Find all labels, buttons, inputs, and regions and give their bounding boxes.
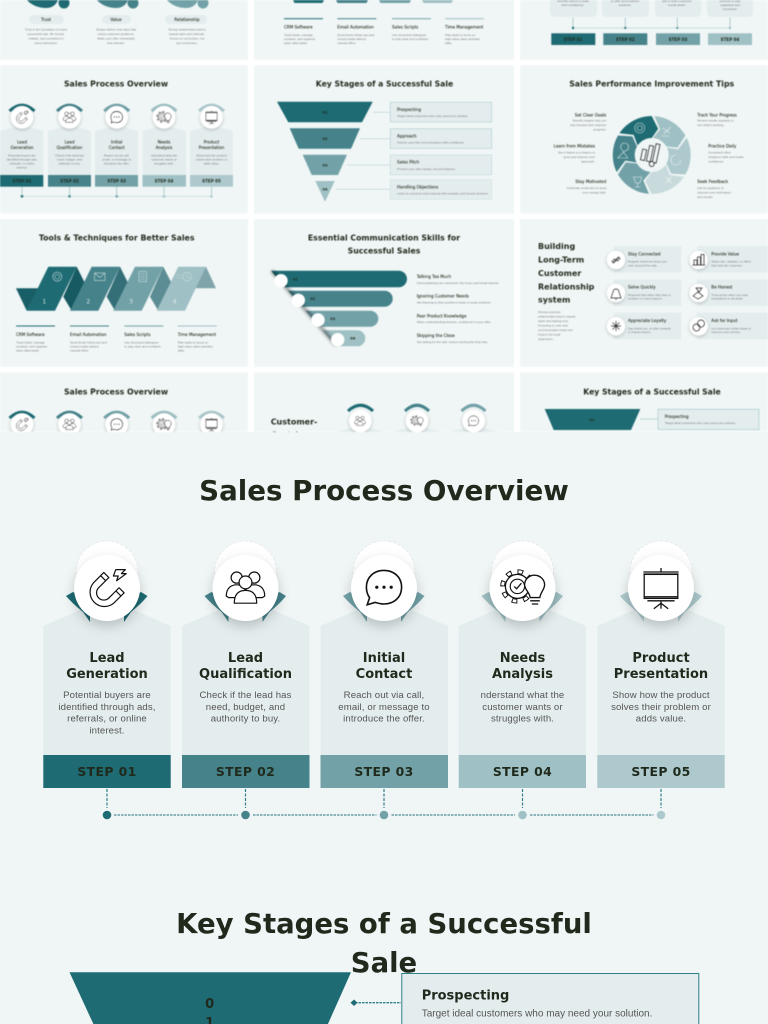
panel: tools and techniques thumbnail: Plan tasks to focus on [178,340,208,344]
panel: tools bars thumbnail [254,0,514,60]
panel: key stages funnel thumbnail: Sales Pitch [397,160,420,165]
panel: sales process overview thumbnail: struggles with. [154,162,174,166]
step 04: needs analysis: customer wants or [482,702,563,713]
panel: tools bars thumbnail: Plan tasks to focus on [445,33,476,37]
panel: sales process repeat thumbnail (clipped) [0,372,248,432]
callout: prospecting: Target ideal customers who may need your solution. [422,1009,652,1020]
panel: tools bars thumbnail: high-value sales activities [445,37,481,41]
panel: long-term relationship thumbnail: to repeat buyers. [628,330,651,334]
panel: tools and techniques thumbnail: 4 [173,298,177,306]
timeline connector [103,789,665,819]
panel: performance tips thumbnail: Review results regularly to [697,118,734,122]
panel: tools bars thumbnail: Email Automation [337,24,374,29]
panel: sales process overview thumbnail: authority to buy. [59,162,81,166]
step 03: initial contact: Contact [356,667,412,682]
panel: sales process overview thumbnail: Show how the product [196,154,227,158]
panel: performance tips thumbnail: stay focused and measure [570,123,607,127]
panel: core values thumbnail: Strong relationships lead to [168,28,206,32]
panel: long-term relationship thumbnail: Trust grows when you stay [711,293,748,297]
panel: tools bars thumbnail: Sales Scripts [392,24,418,29]
step 02: lead qualification: STEP 02 [216,764,275,779]
panel: sales process overview thumbnail: nderstand what the [151,154,177,158]
panel: tools and techniques thumbnail: Email Automation [70,332,107,337]
panel: core values thumbnail: Trust is the foundation of every [25,28,68,32]
step 02: lead qualification: Lead [228,651,263,666]
panel: steps thumbnail: their confidence. [562,3,584,7]
step 03: initial contact: Reach out via call, [344,690,424,701]
panel: customer-centric thumbnail (clipped): Customer- [271,418,317,426]
panel: long-term relationship thumbnail: Relationship [538,282,595,291]
panel: tools and techniques thumbnail: contacts, and organize [16,344,47,348]
panel: performance tips thumbnail: improve your techniques [697,190,731,194]
panel: long-term relationship thumbnail: relationships lead to repeat [538,314,575,318]
panel: core values thumbnail: and relevant. [107,41,125,45]
panel: long-term relationship thumbnail: Building [538,242,575,251]
panel: sales process overview thumbnail: STEP 04 [155,178,173,184]
step 01: lead generation: referrals, or online [67,714,147,724]
panel: key stages repeat thumbnail (clipped): Target ideal customers who may need your solution. [665,421,736,425]
panel: core values thumbnail: Relationship [174,17,200,22]
panel: tools and techniques thumbnail: 2 [86,298,90,306]
panel: tools bars thumbnail: Track leads, manage [284,33,313,37]
panel: customer-centric thumbnail (clipped) [254,372,514,440]
panel: tools bars thumbnail: Time Management [444,24,484,29]
panel: sales process overview thumbnail: introduce the offer. [104,162,130,166]
panel: sales process overview thumbnail: adds value. [204,162,220,166]
panel: sales process overview thumbnail: solves their problem or [196,158,227,162]
step 03: initial contact [320,541,448,788]
panel: performance tips thumbnail: Consistent effort [708,150,731,154]
heading: key stages of a successful sale: Key Stages of a Successful [176,908,592,940]
panel: tools bars thumbnail: sales data easily. [284,41,308,45]
step 02: lead qualification: need, budget, and [206,702,285,713]
panel: sales process overview thumbnail: Sales Process Overview [64,80,168,89]
panel: sales process overview thumbnail: interest. [16,166,28,170]
panel: sales process overview thumbnail: Check if the lead has [55,154,84,158]
panel: long-term relationship thumbnail: Long-Term [538,256,584,265]
panel: sales process repeat thumbnail (clipped): Sales Process Overview [64,388,168,396]
step 04: needs analysis: STEP 04 [493,764,552,779]
panel: long-term relationship thumbnail: improve your service. [711,330,741,334]
panel: long-term relationship thumbnail: Respond fast when they face a [628,293,671,297]
panel: communication skills thumbnail: Successful Sales [348,246,421,256]
step 04: needs analysis: struggles with. [491,714,554,724]
panel: steps thumbnail: STEP 04 [721,37,739,42]
panel: key stages funnel thumbnail: Prospecting [397,107,421,112]
panel: long-term relationship thumbnail: sales and lasting trust. [538,319,569,323]
panel: performance tips thumbnail: your energy high. [582,190,606,194]
panel: communication skills thumbnail [254,219,514,367]
panel: communication skills thumbnail: 01 [293,278,298,282]
panel: tools bars thumbnail: Use structured dialogues [392,33,427,37]
panel: performance tips thumbnail: Specific targets help you [573,118,607,122]
panel: communication skills thumbnail: Ignoring Customer Needs [417,294,469,298]
panel: key stages funnel thumbnail: Key Stages of a Successful Sale [316,80,453,89]
step 01: lead generation: STEP 01 [77,764,137,779]
step 03: initial contact: introduce the offer. [343,714,425,724]
panel: tools and techniques thumbnail: to stay clear and confident. [124,344,161,348]
step 03: initial contact: email, or message to [338,702,430,713]
panel: sales process overview thumbnail: Qualification [57,145,83,150]
panel: tools and techniques thumbnail: high-value sales activities [178,344,213,348]
panel: steps thumbnail: STEP 03 [669,37,687,42]
panel: core values thumbnail: Trust [40,17,51,22]
panel: long-term relationship thumbnail: Regular check-ins show you [628,260,667,264]
panel: communication skills thumbnail: Overexplaining can overwhelm the buyer and break interest. [417,281,499,285]
panel: tools bars thumbnail: CRM Software [284,24,313,29]
panel: key stages funnel thumbnail: 02 [322,137,328,141]
heading: key stages of a successful sale: Sale [351,947,417,979]
panel: sales process overview thumbnail: STEP 01 [13,178,31,184]
panel: long-term relationship thumbnail: Share tips, updates, or offers [711,260,751,264]
panel: tools and techniques thumbnail: 3 [129,298,133,306]
arrow: prospecting to funnel [350,1000,401,1006]
panel: performance tips thumbnail: Seek Feedback [697,179,729,184]
step 01: lead generation: identified through ads, [58,702,156,713]
panel: steps thumbnail: solutions. [618,3,632,7]
panel: tools and techniques thumbnail: daily. [178,348,185,352]
step 04: needs analysis: nderstand what the [481,690,564,701]
panel: key stages funnel thumbnail: Target ideal customers who may need your solution. [397,114,469,118]
panel: communication skills thumbnail: Essential Communication Skills for [308,234,460,242]
panel: customer-centric thumbnail (clipped): Centric [271,430,303,440]
panel: communication skills thumbnail: Skipping the Close [417,333,455,338]
panel: tools and techniques thumbnail: Sales Scripts [124,332,151,337]
panel: sales process overview thumbnail: Analysis [156,145,172,150]
panel: communication skills thumbnail: 04 [350,336,356,340]
panel: long-term relationship thumbnail: problem or need support. [628,297,663,301]
panel: performance tips thumbnail: confidence. [708,160,724,164]
panel: sales process overview thumbnail: need, budget, and [57,158,82,162]
panel: key stages funnel thumbnail: 03 [322,164,328,168]
step 02: lead qualification: authority to buy. [211,714,280,724]
panel: tools bars thumbnail: manual effort. [337,41,356,45]
panel: core values thumbnail: repeat sales and referrals. [169,32,205,36]
panel: sales process overview thumbnail: Reach out via call, [104,154,129,158]
panel: long-term relationship thumbnail: buyers into loyal [538,332,561,336]
page background lower [0,432,768,1024]
panel: performance tips thumbnail [520,66,768,214]
step 05: product presentation: Product [632,651,690,666]
heading: key stages of a successful sale [176,908,592,979]
funnel stage 01 [70,972,351,1024]
panel: performance tips thumbnail: Sales Performance Improvement Tips [569,80,735,89]
step 03: initial contact: Initial [363,651,405,666]
panel: sales process overview thumbnail: STEP 02 [60,178,79,184]
panel: sales process overview thumbnail [0,66,248,214]
panel: key stages funnel thumbnail [254,66,514,214]
panel: sales process overview thumbnail: STEP 05 [202,178,221,184]
step 05: product presentation: Presentation [614,667,708,682]
panel: tools bars thumbnail: Send timely follow-ups and [337,33,375,37]
callout: prospecting [402,974,699,1024]
panel: performance tips thumbnail: see what's working. [697,123,724,127]
panel: long-term relationship thumbnail: Appreciate Loyalty [628,318,667,323]
panel: steps thumbnail: organized and [720,3,740,7]
step 02: lead qualification: Check if the lead has [199,690,292,701]
panel: performance tips thumbnail: Practice Daily [708,144,737,148]
panel: core values thumbnail: Focus on connection, not [170,36,204,40]
panel: performance tips thumbnail: Celebrate small wins to keep [567,186,607,190]
panel: tools bars thumbnail: contacts, and organize [284,37,315,41]
step 01: lead generation: Potential buyers are [63,690,151,701]
panel: tools and techniques thumbnail: manual effort. [70,348,89,352]
panel: steps thumbnail: needs better. [668,3,686,7]
panel: long-term relationship thumbnail: supporters. [538,337,554,341]
step 04: needs analysis [459,541,586,788]
panel: steps thumbnail [520,0,768,60]
panel: key stages repeat thumbnail (clipped): Prospecting [665,414,689,419]
panel: core values thumbnail: reliable, and consistent in [29,36,64,40]
panel: steps thumbnail: consistent. [723,7,738,11]
panel: performance tips thumbnail: Ask for guidance to [697,186,724,190]
thumbnail gallery [0,0,768,440]
panel: key stages funnel thumbnail: 01 [322,110,328,114]
panel: tools and techniques thumbnail: Use structured dialogues [124,340,159,344]
panel: performance tips thumbnail: progress. [593,128,606,132]
panel: communication skills thumbnail: 02 [310,297,316,301]
panel: sales process overview thumbnail: STEP 03 [107,178,126,184]
step 05: product presentation: solves their problem or [611,702,712,713]
panel: communication skills thumbnail: Not listening to their problems leads to weak solutions. [417,300,491,304]
panel: performance tips thumbnail: and results. [697,195,713,199]
panel: sales process overview thumbnail: Potential buyers are [8,154,36,158]
panel: sales process overview thumbnail: Needs [158,140,170,144]
panel: key stages funnel thumbnail: Approach [397,133,417,138]
panel: key stages repeat thumbnail (clipped): 01 [589,418,595,422]
panel: long-term relationship thumbnail: Let customers share ideas to [711,326,751,330]
step 05: product presentation: STEP 05 [631,764,691,779]
panel: steps thumbnail: STEP 02 [616,37,635,42]
step 02: lead qualification [182,541,310,788]
panel: tools and techniques thumbnail: CRM Software [16,332,45,337]
panel: sales process overview thumbnail: Lead [17,140,27,144]
panel: tools and techniques thumbnail: Time Management [177,332,216,337]
panel: long-term relationship thumbnail: Strong customer [538,310,561,314]
panel: long-term relationship thumbnail: that help the customer. [711,263,743,267]
panel: sales process overview thumbnail: referrals, or online [10,162,35,166]
panel: tools bars thumbnail: daily. [445,41,452,45]
panel: core values thumbnail: Always deliver real value that [96,28,136,32]
panel: long-term relationship thumbnail: Provide Value [711,251,739,256]
panel: core values thumbnail: every interaction. [34,41,58,45]
panel: tools and techniques thumbnail: Tools & Techniques for Better Sales [39,234,195,242]
panel: tools and techniques thumbnail: sales data easily. [16,348,40,352]
panel: communication skills thumbnail: Poor Product Knowledge [417,313,467,318]
panel: long-term relationship thumbnail: Customer [538,269,581,278]
step 02: lead qualification: Qualification [199,667,292,682]
panel: sales process overview thumbnail: Contact [109,145,125,150]
panel: tools and techniques thumbnail: 1 [42,298,46,306]
panel: performance tips thumbnail: Set Clear Goals [575,112,606,118]
panel: communication skills thumbnail: Not asking for the sale means missing the final step. [417,340,488,344]
step 01: lead generation: interest. [89,726,125,736]
panel: long-term relationship thumbnail: communication helps turn [538,328,574,332]
panel: tools and techniques thumbnail: Send timely follow-ups and [70,340,107,344]
panel: long-term relationship thumbnail: transparent in all deals. [711,297,743,301]
panel: performance tips thumbnail: approach. [581,160,595,164]
panel: communication skills thumbnail: When understanding lessons, confidence in your offer. [417,320,491,324]
panel: long-term relationship thumbnail [520,219,768,367]
panel: core values thumbnail: just conversion. [175,41,198,45]
step 01: lead generation: Generation [66,667,148,682]
panel: communication skills thumbnail: 03 [330,317,336,321]
funnel stage 01: 0 [205,997,214,1012]
step 05: product presentation [597,541,725,788]
panel: long-term relationship thumbnail: Say thank you, or offer rewards [628,326,671,330]
panel: core values thumbnail: successful sale. Be honest, [27,32,65,36]
panel: tools and techniques thumbnail [0,219,248,367]
panel: long-term relationship thumbnail: care beyond the sale. [628,263,658,267]
panel: key stages funnel thumbnail: 04 [322,188,328,192]
panel: key stages funnel thumbnail: Present your offer clearly, not just features. [397,167,456,171]
panel: sales process overview thumbnail: Product [204,140,220,144]
panel: sales process overview thumbnail: identified through ads, [7,158,37,162]
panel: sales process overview thumbnail: Lead [65,140,75,144]
step 04: needs analysis: Analysis [492,667,553,682]
panel: tools and techniques thumbnail: nurture leads without [70,344,99,348]
panel: tools and techniques thumbnail: Track leads, manage [16,340,45,344]
panel: performance tips thumbnail: grow and improve your [564,155,595,159]
panel: tools bars thumbnail: nurture leads without [337,37,366,41]
panel: sales process overview thumbnail: Generation [11,145,34,150]
panel: key stages funnel thumbnail: Listen to concerns and respond with empathy and honest answers. [397,192,489,196]
step 03: initial contact: STEP 03 [354,764,414,779]
panel: sales process overview thumbnail: Initial [111,140,122,144]
step 05: product presentation: Show how the product [612,690,710,701]
panel: communication skills thumbnail: Talking Too Much [416,274,452,279]
panel: long-term relationship thumbnail: Ask for Input [711,318,738,323]
step 01: lead generation: Lead [89,651,125,666]
panel: key stages repeat thumbnail (clipped): Key Stages of a Successful Sale [583,388,721,396]
panel: performance tips thumbnail: sharpens skills and builds [708,155,744,159]
panel: key stages funnel thumbnail: Handling Objections [397,184,438,189]
panel: performance tips thumbnail: Learn from Mistakes [554,144,595,148]
panel: core values thumbnail: Make your offer meaningful [97,36,135,40]
panel: tools bars thumbnail: to stay clear and confident. [392,37,429,41]
panel: core values thumbnail: Value [110,17,122,22]
panel: long-term relationship thumbnail: Be Honest [711,285,733,290]
step 04: needs analysis: Needs [500,651,546,666]
panel: core values thumbnail [0,0,248,60]
step 05: product presentation: adds value. [636,714,686,724]
panel: sales process overview thumbnail: email, or message to [102,158,131,162]
panel: steps thumbnail: STEP 01 [564,37,582,42]
panel: core values thumbnail: solves customer problems. [98,32,135,36]
panel: performance tips thumbnail: Stay Motivated [575,179,607,184]
panel: performance tips thumbnail: See it failure is a chance to [558,150,595,154]
callout: prospecting: Prospecting [422,988,509,1004]
panel: sales process overview thumbnail: customer wants or [151,158,177,162]
panel: long-term relationship thumbnail: Stay Connected [628,251,661,256]
panel: sales process overview thumbnail: Presentation [199,145,225,150]
panel: long-term relationship thumbnail: Solve Quickly [628,285,656,290]
panel: key stages repeat thumbnail (clipped) [520,372,768,432]
heading: sales process overview: Sales Process Overview [199,474,569,507]
panel: performance tips thumbnail: Track Your Progress [696,112,737,118]
step 01: lead generation [43,541,171,788]
panel: long-term relationship thumbnail: Focusing on care and [538,324,568,328]
panel: long-term relationship thumbnail: system [538,296,570,305]
panel: key stages funnel thumbnail: Nurture your first communication with confidence. [397,140,465,144]
